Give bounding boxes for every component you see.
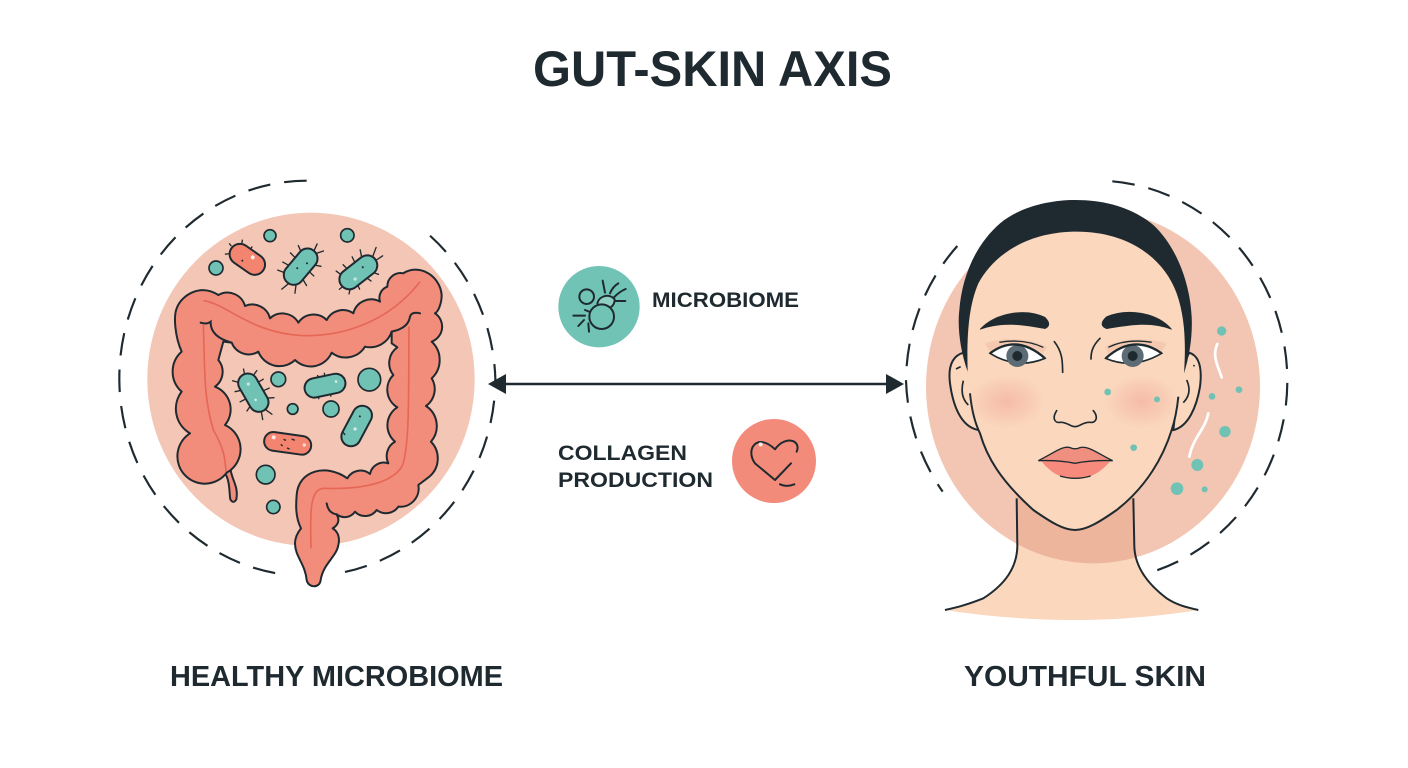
appendix — [225, 470, 237, 502]
dashed ring right — [906, 181, 1287, 571]
label: microbiome: MICROBIOME — [652, 289, 799, 312]
bacterium: teal top centre — [269, 235, 331, 300]
neck — [945, 490, 1198, 620]
icon: collagen heart badge — [732, 419, 816, 503]
bacterium: teal middle left — [227, 363, 281, 425]
colon fold details — [201, 313, 420, 514]
bacterium: red top — [222, 235, 271, 279]
ears — [949, 353, 1201, 430]
double-headed arrow — [488, 374, 904, 394]
neck outline — [945, 498, 1198, 610]
eye right — [1106, 341, 1162, 367]
label: collagen production: COLLAGEN — [558, 441, 687, 465]
bacterium: red bottom — [263, 431, 312, 456]
hair — [959, 200, 1192, 373]
label: youthful skin: YOUTHFUL SKIN — [964, 661, 1206, 693]
label: collagen production: PRODUCTION — [558, 468, 713, 492]
pink background circle — [147, 213, 475, 546]
dashed ring left — [119, 181, 495, 574]
panel: healthy microbiome gut illustration — [119, 181, 495, 586]
panel: youthful skin face illustration — [906, 181, 1287, 620]
pink background circle — [926, 210, 1260, 563]
icon: microbiome badge — [558, 266, 640, 347]
bacterium: teal capsule — [338, 402, 375, 450]
colon — [173, 270, 442, 586]
bacterium: teal top right — [328, 241, 390, 299]
title: GUT-SKIN AXIS — [533, 41, 892, 97]
face — [967, 227, 1187, 530]
neck shadow — [1016, 496, 1135, 564]
ear details — [956, 365, 1195, 405]
eye left — [990, 341, 1045, 367]
skin particles — [1104, 326, 1242, 495]
nose — [1054, 338, 1100, 427]
white glow squiggles — [1189, 344, 1222, 457]
colon inner lines — [203, 282, 420, 548]
teal spores — [209, 229, 381, 514]
label: collagen production — [558, 441, 713, 492]
eyeshadow — [985, 339, 1167, 353]
label: healthy microbiome: HEALTHY MICROBIOME — [170, 661, 503, 693]
cheek blush — [968, 375, 1178, 428]
bacterium: teal middle right — [302, 369, 348, 402]
lips — [1038, 447, 1113, 478]
jaw outline — [970, 393, 1178, 530]
eyebrows — [980, 312, 1172, 329]
